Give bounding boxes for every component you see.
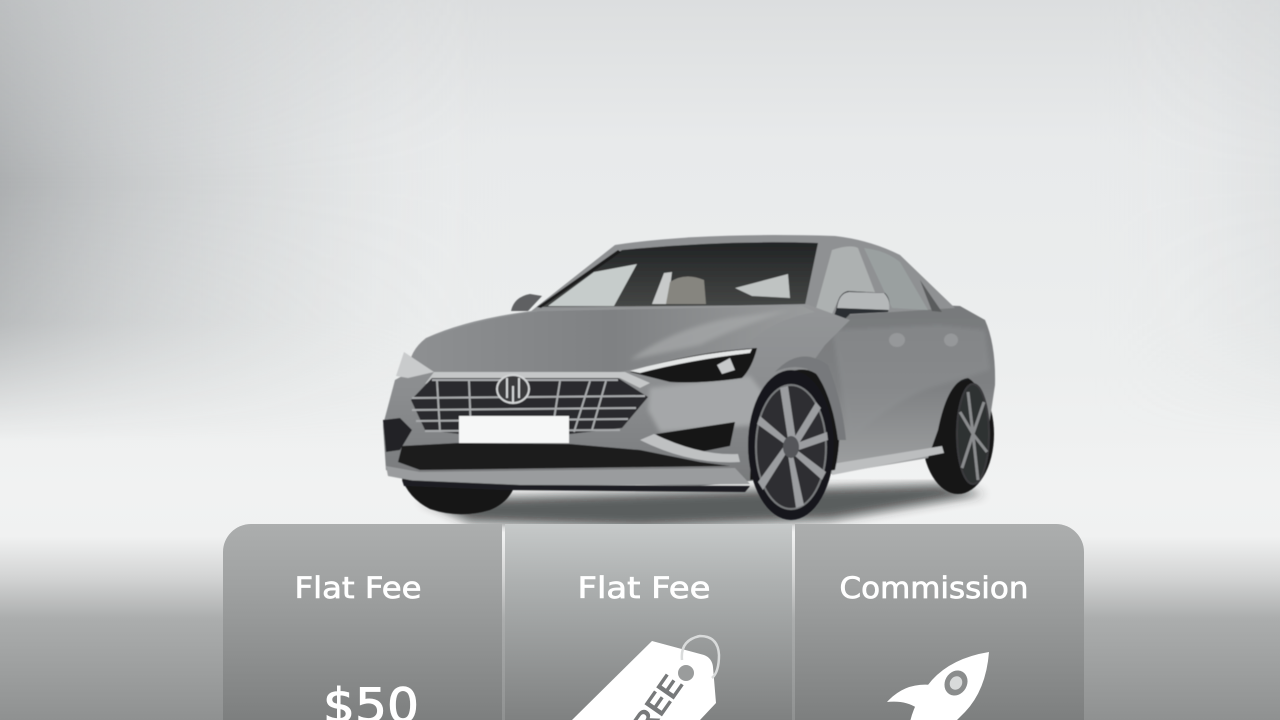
panel: commission <box>795 524 1084 720</box>
mirror far <box>511 294 542 311</box>
body front and hood <box>383 304 850 486</box>
heading: flat fee: Flat Fee <box>294 571 422 605</box>
rear quarter window <box>920 280 942 312</box>
left fog vent <box>383 418 412 452</box>
car body side <box>770 300 995 474</box>
side sheen <box>832 325 990 440</box>
front left tyre <box>401 476 517 514</box>
seat centre <box>666 276 706 304</box>
windshield <box>540 242 818 307</box>
rear window reflection <box>735 274 790 298</box>
pricing panel <box>223 524 1084 720</box>
front side window <box>815 246 878 314</box>
left headlight <box>396 352 434 378</box>
licence plate <box>459 416 569 443</box>
hood <box>410 306 815 372</box>
fender highlight <box>648 376 765 432</box>
door handles <box>889 333 905 347</box>
heading: flat fee: Flat Fee <box>578 571 710 605</box>
rear wheel <box>957 384 989 484</box>
a pillar <box>537 250 621 308</box>
lower intake <box>398 443 730 470</box>
wheel arch <box>750 370 839 480</box>
icon: rocket <box>887 652 989 720</box>
grille badge <box>497 375 529 403</box>
panel: flat fee $50 <box>223 524 502 720</box>
rear tyre <box>922 374 994 494</box>
rear side window <box>864 248 928 310</box>
windshield reflection left <box>548 264 637 306</box>
bonnet edge <box>425 372 650 388</box>
hood sheen <box>630 310 790 360</box>
ground shadow <box>420 484 985 527</box>
grille <box>411 378 648 434</box>
right fog vent <box>656 422 735 452</box>
roof and pillars <box>530 235 955 318</box>
heading: commission: Commission <box>840 571 1028 605</box>
mirror near <box>832 291 889 326</box>
front lip <box>386 466 750 486</box>
panel: flat fee free <box>505 524 792 720</box>
bumper highlight <box>640 434 740 462</box>
front wheel <box>748 370 834 520</box>
sill highlight <box>832 446 944 475</box>
lower lip <box>402 480 750 492</box>
headlight <box>630 348 757 382</box>
seat left <box>652 272 672 304</box>
icon: free tag <box>572 636 719 720</box>
arch highlight <box>775 356 846 440</box>
headlight strip <box>630 349 752 373</box>
car <box>383 235 995 527</box>
